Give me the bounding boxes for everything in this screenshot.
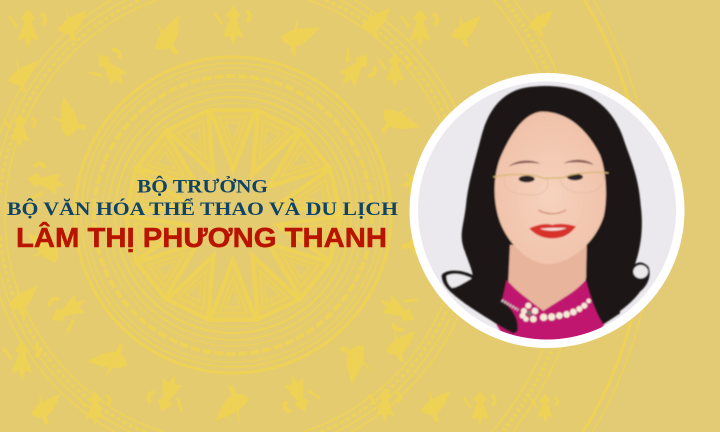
nose [538,210,566,214]
hair curl gap left [447,274,472,288]
text block: title and name [7,176,398,253]
glasses [493,172,608,195]
hair curl gap right [633,265,648,278]
name: LÂM THỊ PHƯƠNG THANH [16,222,387,253]
hair lock over dress: left [492,301,519,334]
eyes [519,176,535,182]
lips [529,224,576,238]
eyebrows [508,160,541,167]
face [495,112,606,264]
drum figures band [2,5,559,425]
teeth [540,228,567,231]
portrait photo [418,81,676,342]
neck [508,245,587,312]
heading: minister: BỘ TRƯỞNG [137,176,268,198]
dress [497,280,604,342]
portrait frame [410,73,684,348]
heading: ministry: BỘ VĂN HÓA THỂ THAO VÀ DU LỊCH [7,198,398,220]
hair lock over dress: right [585,278,620,324]
star rings [126,110,340,320]
hair [442,86,650,333]
necklace [502,299,591,322]
